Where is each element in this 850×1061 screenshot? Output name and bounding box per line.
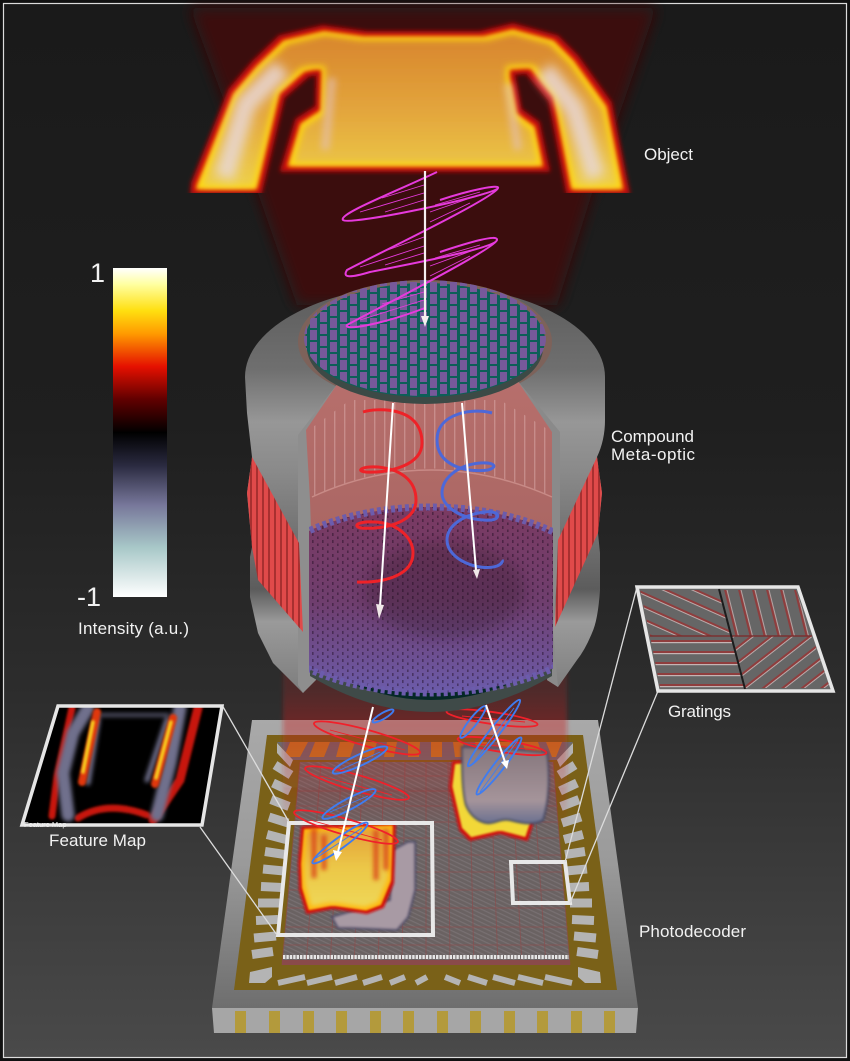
grating quadrant diagonal down	[640, 590, 731, 636]
label: Feature Map: Feature Map	[49, 831, 146, 850]
grating quadrant horizontal	[651, 640, 744, 688]
lower projected image yellow	[299, 823, 395, 913]
compound meta-optic lens	[245, 270, 611, 712]
tile grid lines	[282, 762, 570, 965]
grating quadrant near vertical	[719, 590, 812, 636]
magenta incident helix	[343, 172, 498, 327]
arrow: left beam to sensor	[333, 707, 373, 861]
label: Compound Meta-optic: Meta-optic	[611, 445, 696, 464]
interior wall	[306, 380, 552, 560]
red beam wash on chip	[283, 670, 567, 840]
polarised beams on chip	[292, 697, 547, 867]
light beam: object to lens	[190, 8, 656, 305]
red wave left	[292, 706, 547, 850]
upper projected image yellow	[450, 760, 532, 840]
label: Object: Object	[644, 145, 693, 164]
scale maximum: 1	[90, 258, 105, 288]
tiny ghost caption: Feature Map	[24, 820, 67, 829]
right cut face	[517, 380, 560, 687]
gold frame	[234, 735, 617, 990]
bottom bond pads	[278, 977, 572, 983]
grating quadrant diagonal up	[731, 636, 830, 688]
blue helix	[437, 411, 502, 568]
colour scale bar	[77, 258, 189, 638]
copper ring	[298, 280, 552, 404]
selection frame: gratings	[511, 862, 570, 903]
top pad strip	[277, 742, 573, 760]
selection frame: feature map	[278, 823, 433, 935]
label: Compound Meta-optic: Compound	[611, 427, 694, 446]
bottom disc substrate	[310, 650, 552, 700]
label: Compound Meta-optic	[611, 427, 696, 464]
arrow: right inner beam	[462, 403, 480, 579]
top disc rim	[307, 292, 543, 404]
red helix	[357, 410, 422, 582]
chip front edge	[212, 1008, 638, 1033]
comb strip	[283, 955, 569, 959]
arrow: incident beam	[421, 171, 429, 327]
interior back edge	[312, 470, 552, 497]
sensor tile array	[282, 762, 570, 965]
right red ribs	[555, 457, 602, 627]
top orange pads	[284, 742, 562, 757]
chip top surface	[212, 720, 638, 1008]
left red ribs	[247, 457, 303, 632]
label: Gratings: Gratings	[668, 702, 731, 721]
bottom disc rim	[310, 660, 552, 712]
bottom metasurface	[309, 504, 553, 696]
arrow: right beam to sensor	[486, 705, 509, 769]
lower projected image grey	[332, 842, 415, 930]
corner pads	[249, 743, 601, 983]
top metasurface	[304, 280, 546, 396]
label: Photodecoder: Photodecoder	[639, 922, 746, 941]
left bond pads	[252, 765, 291, 954]
blue wave left	[309, 697, 525, 867]
interior ribs	[306, 400, 552, 497]
leader lines	[200, 587, 658, 935]
housing silhouette	[245, 285, 605, 693]
front gold contacts	[235, 1011, 615, 1033]
scale title: Intensity (a.u.)	[78, 619, 189, 638]
feature map inset	[22, 706, 222, 850]
feature map signal	[52, 708, 198, 820]
object image	[192, 25, 628, 193]
scale minimum: -1	[77, 582, 101, 612]
gratings inset	[637, 587, 833, 721]
top disc substrate	[305, 283, 545, 397]
photodecoder chip	[212, 670, 638, 1033]
arrow: left inner beam	[376, 403, 393, 619]
upper projected image grey	[462, 747, 549, 823]
right bond pads	[559, 765, 598, 954]
left cut face	[298, 383, 338, 693]
